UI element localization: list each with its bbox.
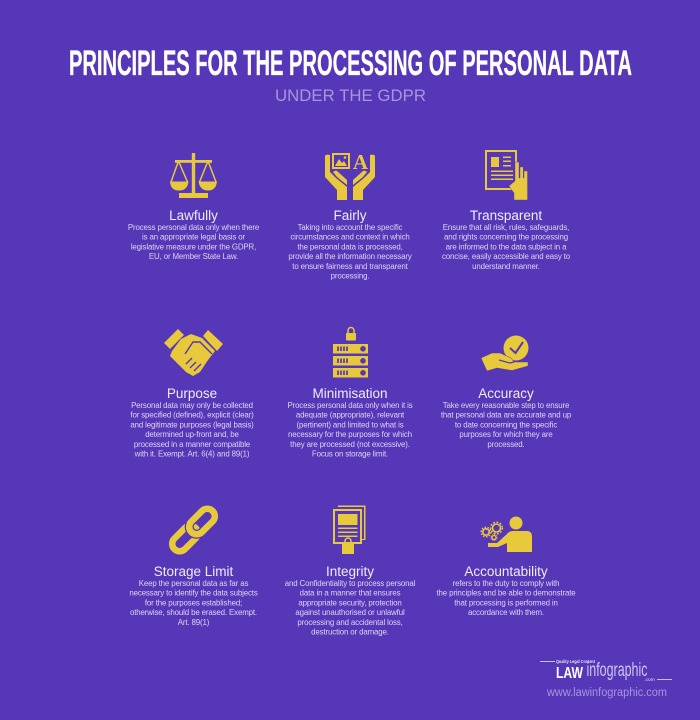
text block: [287, 401, 413, 458]
text block: Process personal data only when it is: [287, 401, 413, 410]
icon: person with gears: [481, 516, 532, 552]
text block: Personal data may only be collected: [131, 401, 253, 410]
text block: with it. Exempt. Art. 6(4) and 89(1): [134, 450, 250, 458]
icon: hands holding picture and letter: A: [353, 150, 369, 174]
text block: data in a manner that ensures: [300, 589, 401, 598]
panel: Accountability: [436, 516, 576, 617]
text block: processed.: [487, 440, 525, 449]
icon: server with lock: [333, 328, 368, 378]
text block: and rights concerning the processing: [444, 233, 568, 242]
heading: Integrity: [326, 564, 374, 579]
text block: necessary for the purposes for which: [288, 430, 412, 439]
text block: Keep the personal data as far as: [139, 579, 248, 588]
text block: provide all the information necessary: [288, 252, 412, 261]
text block: [130, 401, 254, 458]
icon: chain link: [169, 506, 218, 554]
text block: to date concerning the specific: [455, 420, 557, 429]
text block: and legitimate purposes (legal basis): [130, 420, 254, 429]
text block: [441, 401, 572, 449]
text block: the principles and be able to demonstrate: [436, 589, 576, 598]
logo: Law Infographic: Quality Legal Content: [556, 659, 595, 664]
text block: necessary to identify the data subjects: [129, 589, 258, 598]
heading: Accuracy: [478, 386, 534, 401]
text block: processed in a manner compatible: [134, 440, 251, 449]
icon: scales: [170, 153, 217, 198]
text block: [288, 223, 412, 280]
text block: adequate (appropriate), relevant: [296, 411, 405, 420]
text block: the personal data is processed,: [297, 242, 403, 251]
text block: they are processed (not excessive).: [290, 440, 410, 449]
text block: appropriate security, protection: [298, 598, 402, 607]
icon: handshake: [164, 329, 223, 376]
text block: and Confidentiality to process personal: [285, 579, 416, 588]
logo: Law Infographic: [540, 659, 672, 683]
panel: Fairly: [288, 150, 412, 280]
panel: Storage Limit: [129, 506, 258, 627]
panel: Purpose: [130, 329, 254, 458]
icon: hand with check mark: [481, 336, 528, 371]
heading: Storage Limit: [154, 564, 234, 579]
text block: otherwise, should be erased. Exempt.: [130, 608, 257, 617]
logo: Law Infographic: infographic: [586, 660, 648, 681]
text block: Ensure that all risk, rules, safeguards,: [443, 223, 569, 232]
subtitle: UNDER THE GDPR: [275, 87, 426, 105]
text block: processing.: [331, 272, 369, 280]
heading: Transparent: [470, 208, 542, 223]
text block: [442, 223, 571, 271]
text block: Take every reasonable step to ensure: [443, 401, 570, 410]
panel: Lawfully: [128, 153, 260, 261]
text block: against unauthorised or unlawful: [295, 608, 405, 617]
panel: Accuracy: [441, 336, 572, 449]
text block: determined up-front and, be: [145, 430, 240, 439]
text block: is an appropriate legal basis or: [142, 233, 246, 242]
text block: Focus on storage limit.: [312, 450, 388, 458]
panel: Minimisation: [287, 328, 413, 458]
text block: Process personal data only when there: [128, 223, 260, 232]
heading: Accountability: [464, 564, 548, 579]
panel: Transparent: [442, 150, 571, 271]
text block: processing and accidental loss,: [297, 618, 403, 627]
text block: [285, 579, 416, 636]
text block: refers to the duty to comply with: [453, 579, 559, 588]
text block: legislative measure under the GDPR,: [131, 242, 256, 251]
website url: www.lawinfographic.com: [546, 687, 667, 699]
logo: Law Infographic: .com: [644, 678, 655, 683]
text block: that processing is performed in: [454, 598, 558, 607]
text block: for specified (defined), explicit (clear): [130, 411, 254, 420]
text block: Taking into account the specific: [298, 223, 403, 232]
text block: destruction or damage.: [311, 628, 389, 636]
text block: to ensure fairness and transparent: [292, 262, 409, 271]
text block: are informed to the data subject in a: [446, 242, 567, 251]
heading: Purpose: [167, 386, 217, 401]
text block: (pertinent) and limited to what is: [296, 420, 404, 429]
icon: locked documents: [333, 506, 366, 554]
icon: document in hand: [485, 150, 528, 200]
panel: Integrity: [285, 506, 416, 636]
text block: circumstances and context in which: [290, 233, 410, 242]
text block: [129, 579, 258, 627]
text block: for the purposes established;: [145, 598, 242, 607]
heading: Fairly: [334, 208, 367, 223]
heading: Lawfully: [169, 208, 218, 223]
text block: EU, or Member State Law.: [149, 252, 238, 261]
text block: understand manner.: [472, 262, 540, 271]
heading: Minimisation: [312, 386, 388, 401]
text block: [128, 223, 260, 261]
text block: [436, 579, 576, 617]
logo: Law Infographic: LAW: [556, 665, 583, 682]
text block: that personal data are accurate and up: [441, 411, 572, 420]
text block: Art. 89(1): [178, 618, 210, 627]
text block: concise, easily accessible and easy to: [442, 252, 571, 261]
text block: purposes for which they are: [459, 430, 553, 439]
text block: accordance with them.: [468, 608, 544, 617]
